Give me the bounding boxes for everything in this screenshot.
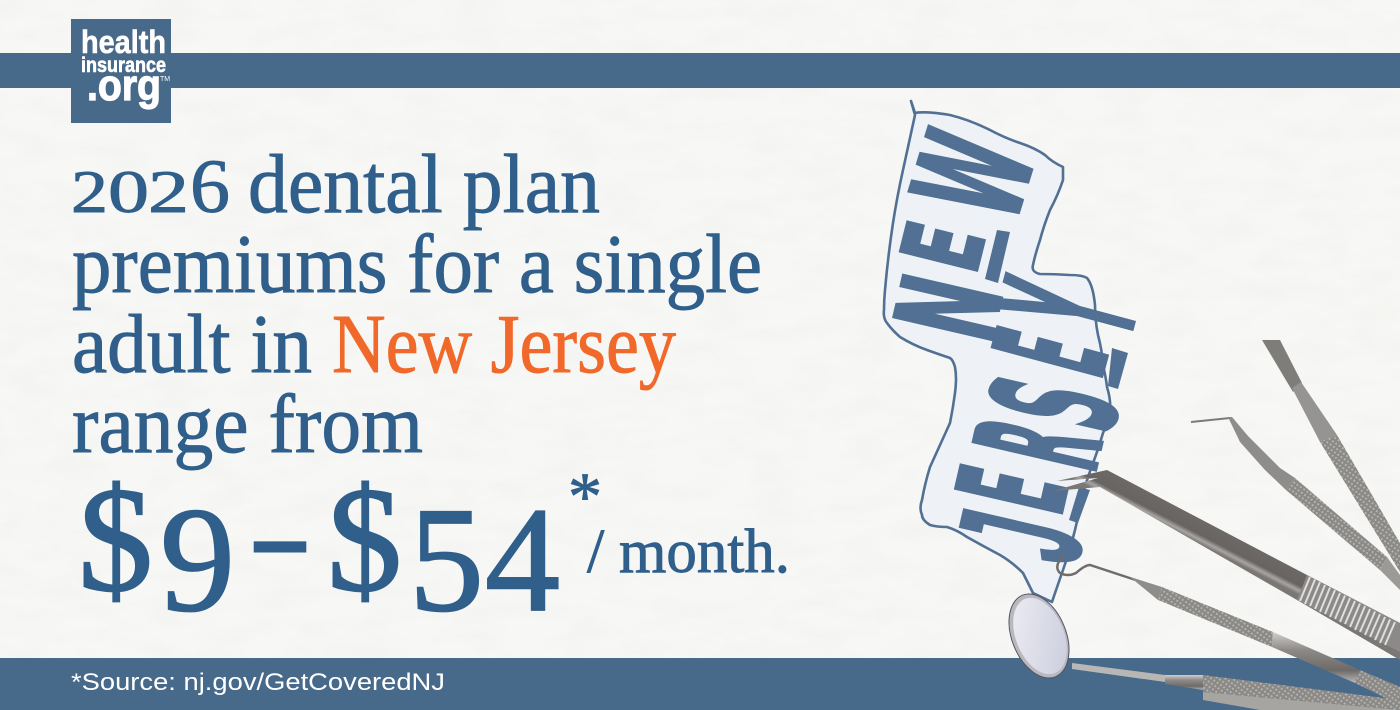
heading year 2026: 6 — [190, 145, 230, 229]
heading year 2026: 2 — [71, 159, 108, 225]
heading — [71, 138, 762, 471]
word: JERSEY: E — [962, 315, 1143, 390]
price range: / — [587, 518, 605, 586]
price range: $ — [327, 457, 402, 623]
top banner bar — [0, 53, 1400, 88]
price range: $ — [78, 457, 153, 623]
word: JERSEY: J — [922, 497, 1121, 577]
icon: probe instrument — [1191, 417, 1400, 590]
price range: 4 — [485, 477, 560, 643]
heading line 3: adult in — [72, 298, 312, 391]
word: JERSEY: Y — [962, 263, 1180, 355]
heading line 1: dental plan — [248, 138, 600, 231]
heading line 4: range from — [72, 378, 423, 471]
word: NEW: N — [867, 263, 1035, 353]
price range: – — [256, 479, 304, 594]
price range — [78, 457, 790, 643]
word: NEW — [867, 115, 1070, 353]
word: JERSEY: E — [927, 454, 1103, 526]
word: JERSEY: S — [955, 363, 1158, 445]
icon: mouth mirror — [997, 585, 1400, 710]
icon: spatula instrument — [1262, 340, 1400, 572]
icon: tweezers — [1053, 470, 1400, 660]
word: JERSEY: R — [940, 405, 1142, 484]
logo: healthinsurance.org: TM — [160, 76, 170, 83]
New Jersey state outline with lettering — [867, 101, 1180, 602]
heading year 2026: 2 — [148, 159, 189, 225]
bottom banner bar — [0, 658, 1400, 710]
icon: explorer instrument — [1057, 555, 1400, 705]
price range: * — [568, 458, 602, 534]
source footnote: *Source: nj.gov/GetCoveredNJ — [71, 669, 445, 696]
heading line 2: premiums for a single — [72, 218, 762, 311]
heading year 2026: 0 — [108, 159, 149, 225]
logo: healthinsurance.org — [71, 19, 171, 123]
price range: month. — [619, 518, 790, 586]
price range: 9 — [160, 477, 235, 643]
logo: healthinsurance.org: .org — [87, 61, 161, 110]
logo: healthinsurance.org: insurance — [81, 54, 166, 77]
dental instruments — [997, 340, 1400, 710]
word: JERSEY — [922, 263, 1180, 577]
logo: healthinsurance.org: health — [81, 24, 166, 60]
word: NEW: W — [880, 115, 1070, 237]
word: NEW: E — [878, 212, 1010, 282]
state outline — [884, 101, 1110, 602]
heading year 2026 — [71, 145, 230, 229]
highlighted state name: New Jersey — [332, 298, 676, 391]
price range: 5 — [409, 477, 484, 643]
